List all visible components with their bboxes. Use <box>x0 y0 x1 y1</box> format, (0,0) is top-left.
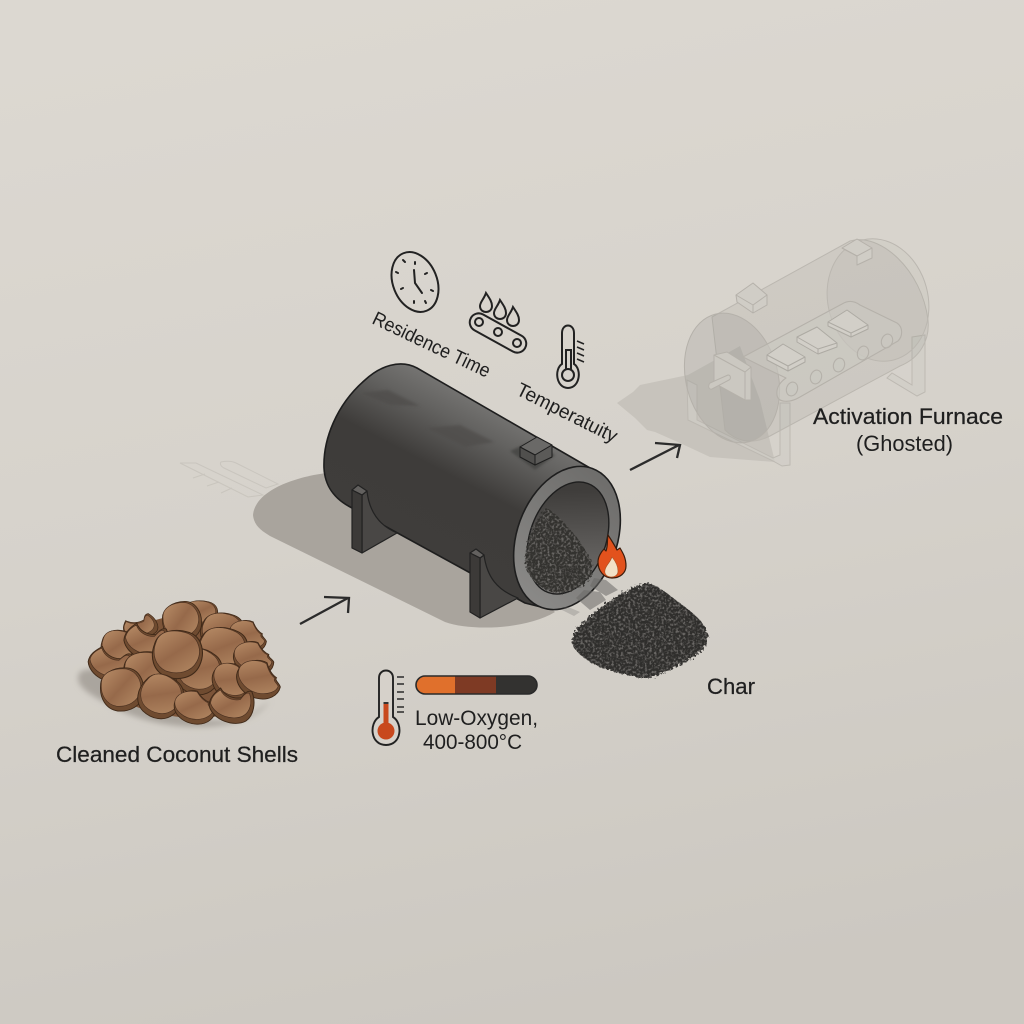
icon: conveyor with flames <box>467 293 529 356</box>
label: residence time: Residence Time <box>369 308 494 382</box>
kiln ground shadow <box>253 473 555 628</box>
furnace conveyor <box>743 301 902 401</box>
pile shadow <box>78 669 270 727</box>
arrow: kiln to furnace <box>630 443 680 470</box>
furnace top boxes <box>736 239 872 313</box>
label: activation furnace: Activation Furnace <box>813 404 1003 429</box>
furnace motor and shaft <box>709 352 751 400</box>
coconut shell pile <box>78 599 289 727</box>
ghosted activation furnace <box>617 227 942 466</box>
furnace cylinder <box>712 240 928 441</box>
kiln cylinder body <box>324 364 590 608</box>
icon: clock <box>383 245 447 319</box>
furnace legs <box>687 335 925 466</box>
arrow: shells to kiln <box>300 597 349 624</box>
pyrolysis kiln <box>324 364 639 625</box>
label: cleaned coconut shells: Cleaned Coconut Shells <box>56 742 298 767</box>
label: temperatuity: Temperatuity <box>513 379 621 448</box>
pile base fill <box>102 615 263 718</box>
furnace shadow <box>617 346 775 462</box>
kiln mouth interior <box>512 471 624 605</box>
furnace tiles <box>767 310 868 371</box>
kiln hatch box <box>510 437 555 470</box>
label: low-oxygen: Low-Oxygen, <box>415 707 538 730</box>
furnace back end <box>814 227 942 373</box>
label: temperature range: 400-800°C <box>423 731 522 754</box>
furnace front end <box>670 302 794 454</box>
kiln rear leg <box>352 485 397 553</box>
flame icon <box>598 535 626 578</box>
label: char: Char <box>707 674 755 699</box>
temperature gradient bar <box>416 676 537 694</box>
label: ghosted: (Ghosted) <box>856 431 953 456</box>
char spill <box>562 578 618 616</box>
char inside kiln <box>525 508 592 592</box>
ghost lines behind kiln <box>180 461 278 497</box>
char pile <box>572 583 708 678</box>
kiln mouth ring <box>495 451 639 625</box>
kiln surface marks <box>361 390 494 447</box>
kiln front leg <box>470 549 518 618</box>
icon: thermometer upper <box>557 326 584 388</box>
icon: thermometer lower <box>373 670 404 745</box>
